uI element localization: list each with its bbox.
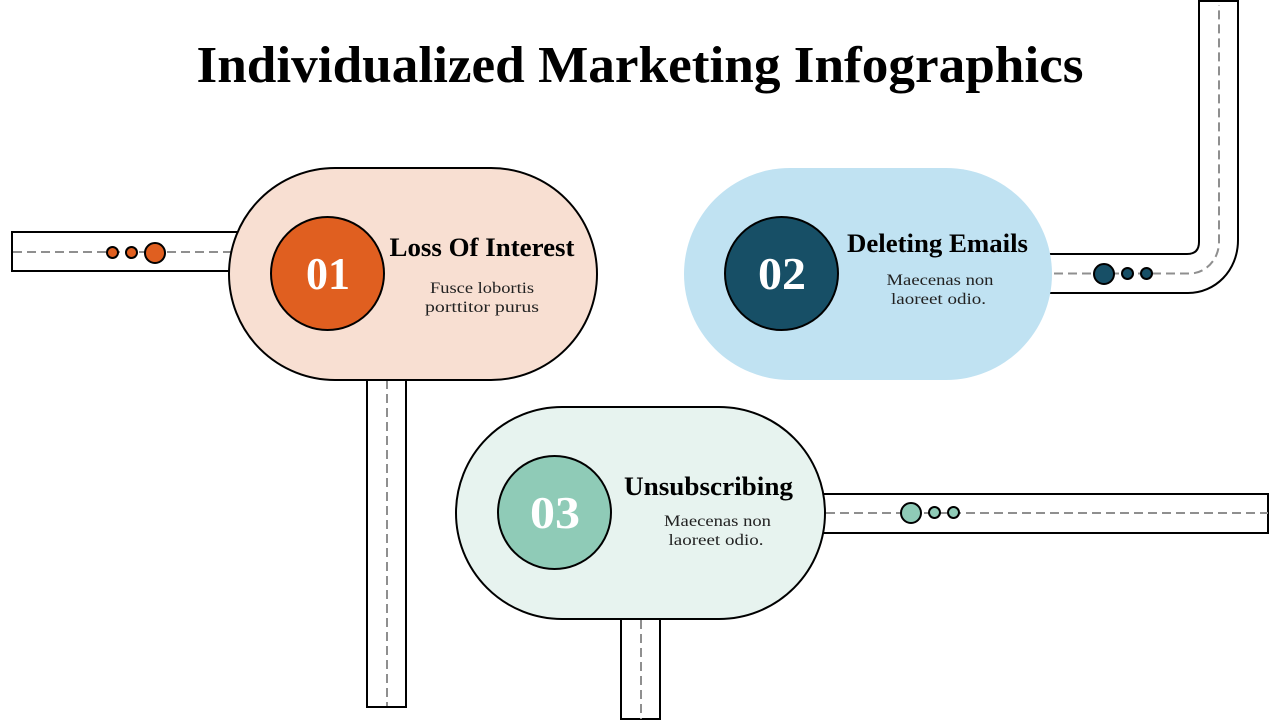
panel 3 background: [456, 407, 825, 619]
road markers: navy dots: [1094, 264, 1152, 284]
road markers: green dots: [901, 503, 959, 523]
panel 1 number badge: 01: [306, 248, 350, 299]
panel 1 number badge: [271, 217, 384, 330]
panel 3 body text: laoreet odio.: [668, 532, 764, 549]
panel 2: Deleting Emails: [684, 168, 1052, 380]
panel 2 number badge: [725, 217, 838, 330]
title: Individualized Marketing Infographics: [196, 37, 1084, 94]
road: right of panel 3: [805, 494, 1268, 533]
panel 2 number badge: 02: [758, 248, 806, 299]
panel 2 background: [684, 168, 1052, 380]
road: below panel 1: [367, 360, 406, 707]
panel 2 body text: Maecenas non: [886, 272, 994, 289]
panel 1 background: [229, 168, 597, 380]
road: curved from panel 2 to top: [1030, 1, 1238, 293]
panel 3: Unsubscribing: [456, 407, 825, 619]
road: left of panel 1: [12, 232, 252, 271]
road markers: orange dots: [107, 243, 165, 263]
panel 3 heading: Unsubscribing: [624, 472, 793, 501]
panel 2 heading: Deleting Emails: [847, 229, 1028, 258]
panel 1 heading: Loss Of Interest: [390, 233, 575, 262]
panel 3 number badge: 03: [530, 487, 580, 538]
panel 3 number badge: [498, 456, 611, 569]
road: below panel 3: [621, 600, 660, 719]
panel 1 body text: porttitor purus: [425, 299, 539, 316]
panel 1: Loss Of Interest: [229, 168, 597, 380]
panel 3 body text: Maecenas non: [664, 513, 771, 530]
panel 2 body text: laoreet odio.: [891, 291, 986, 308]
panel 1 body text: [425, 280, 539, 316]
panel 3 body text: [664, 513, 771, 549]
panel 1 body text: Fusce lobortis: [430, 280, 534, 297]
panel 2 body text: [886, 272, 994, 308]
